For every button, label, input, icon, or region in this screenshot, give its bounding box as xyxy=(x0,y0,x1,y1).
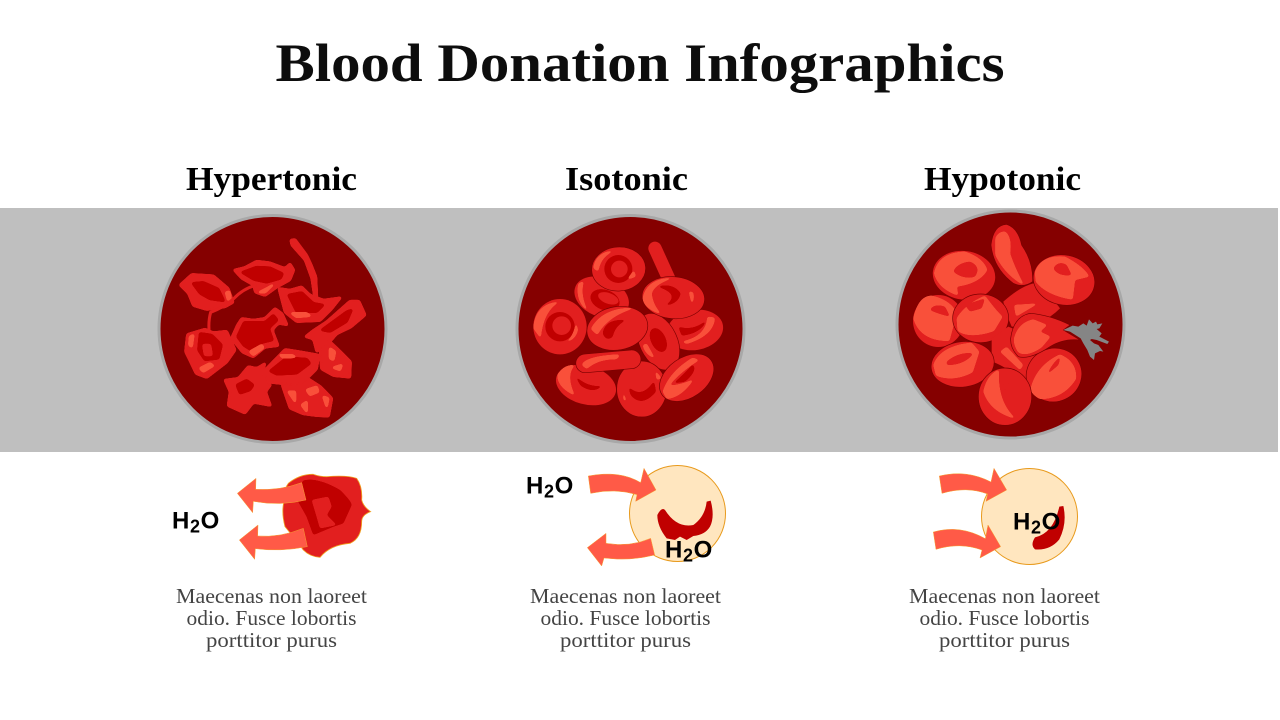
shrunken cell: top centre xyxy=(234,261,294,296)
label: H2O: 2 xyxy=(190,516,201,536)
grey band xyxy=(0,208,1278,452)
lysing cell xyxy=(1011,313,1080,357)
text block: hypertonic description: porttitor purus xyxy=(206,628,337,652)
panel: hypotonic microscope view xyxy=(897,211,1124,438)
label: H2O: H xyxy=(1013,508,1031,536)
shrunken cell: tail xyxy=(291,239,317,298)
panel: isotonic microscope view xyxy=(517,216,744,442)
cell: left xyxy=(533,299,587,354)
label: H2O inside: 2 xyxy=(683,546,694,566)
heading: Hypertonic: Hypertonic xyxy=(186,161,357,198)
shrunken cell: far right xyxy=(305,301,365,352)
label: H2O outside: H xyxy=(526,472,544,500)
text block: isotonic description: odio. Fusce lobortis xyxy=(540,606,710,630)
arrow: water entering xyxy=(588,468,656,501)
heading: Isotonic: Isotonic xyxy=(565,161,688,198)
text block: hypotonic description: odio. Fusce lobortis xyxy=(920,606,1090,630)
label: H2O outside: 2 xyxy=(544,482,555,502)
rod cell: lower centre xyxy=(575,349,642,373)
icon: shrunken cell xyxy=(283,474,371,557)
arrow: water entering top xyxy=(939,468,1007,501)
swollen cell: top xyxy=(991,224,1033,286)
cell: bottom centre xyxy=(617,361,667,417)
text block: hypotonic description: porttitor purus xyxy=(939,628,1070,652)
shrunken cell: bottom left xyxy=(225,363,271,413)
label: H2O: 2 xyxy=(1031,518,1042,538)
diagram: isotonic water flow xyxy=(526,466,726,566)
label: H2O inside: O xyxy=(694,536,713,564)
label: H2O: H xyxy=(172,508,190,534)
text block: isotonic description: Maecenas non laoreet xyxy=(530,584,721,608)
connecting strand xyxy=(209,285,257,333)
diagram: hypotonic water flow xyxy=(933,468,1078,564)
shrunken cell: left xyxy=(185,329,235,378)
text block: hypotonic description: Maecenas non laoreet xyxy=(909,584,1100,608)
shrunken cell: bottom right xyxy=(282,378,332,416)
cell: far right xyxy=(664,305,726,355)
swollen cell: centre behind upper xyxy=(1003,283,1060,327)
arrow: water leaving xyxy=(587,533,655,566)
shrunken cell: centre xyxy=(231,308,287,357)
label: H2O: O xyxy=(201,508,220,534)
cell: behind top xyxy=(568,269,635,326)
cell: top xyxy=(590,245,647,293)
icon: isotonic blood cell xyxy=(657,501,713,540)
cell: top right xyxy=(640,274,706,321)
text block: isotonic description: porttitor purus xyxy=(560,628,691,652)
label: H2O: O xyxy=(1042,508,1061,536)
arrow: water leaving top xyxy=(237,478,306,513)
swollen cell: centre left xyxy=(953,294,1009,343)
shrunken cell: right upper xyxy=(279,287,341,322)
text block: hypertonic description: Maecenas non laoreet xyxy=(176,584,367,608)
cell: bottom left xyxy=(551,358,621,412)
swollen cell: centre lower behind xyxy=(992,327,1047,382)
panel: hypertonic microscope view xyxy=(159,216,386,442)
icon: cell vessel xyxy=(982,468,1078,564)
label: H2O inside: H xyxy=(665,536,683,564)
icon: cell vessel xyxy=(630,466,726,562)
grey cell debris xyxy=(1063,319,1109,360)
rod cell: top right xyxy=(655,248,669,280)
cell: middle xyxy=(583,302,651,355)
shrunken cell: right middle xyxy=(320,340,351,377)
swollen cell: left xyxy=(913,295,964,347)
heading: Hypotonic: Hypotonic xyxy=(924,161,1081,198)
shrunken cell: lower centre xyxy=(262,349,319,385)
label: H2O outside: O xyxy=(555,472,574,500)
swollen cell: bottom xyxy=(978,368,1032,425)
icon: hypotonic blood cell xyxy=(1032,506,1065,549)
cell: bottom right xyxy=(651,344,723,411)
swollen cell: upper right xyxy=(1028,249,1100,311)
swollen cell: upper left xyxy=(930,247,998,304)
diagram: hypertonic water flow xyxy=(172,474,371,559)
text block: hypertonic description: odio. Fusce lobortis xyxy=(186,606,356,630)
swollen cell: bottom right xyxy=(1017,339,1091,411)
cell: centre right xyxy=(628,306,688,377)
arrow: water leaving bottom xyxy=(239,525,307,559)
swollen cell: lower left xyxy=(928,337,997,391)
shrunken cell: top left xyxy=(180,274,233,310)
arrow: water entering bottom xyxy=(933,525,1001,558)
title: Blood Donation Infographics xyxy=(276,33,1004,93)
